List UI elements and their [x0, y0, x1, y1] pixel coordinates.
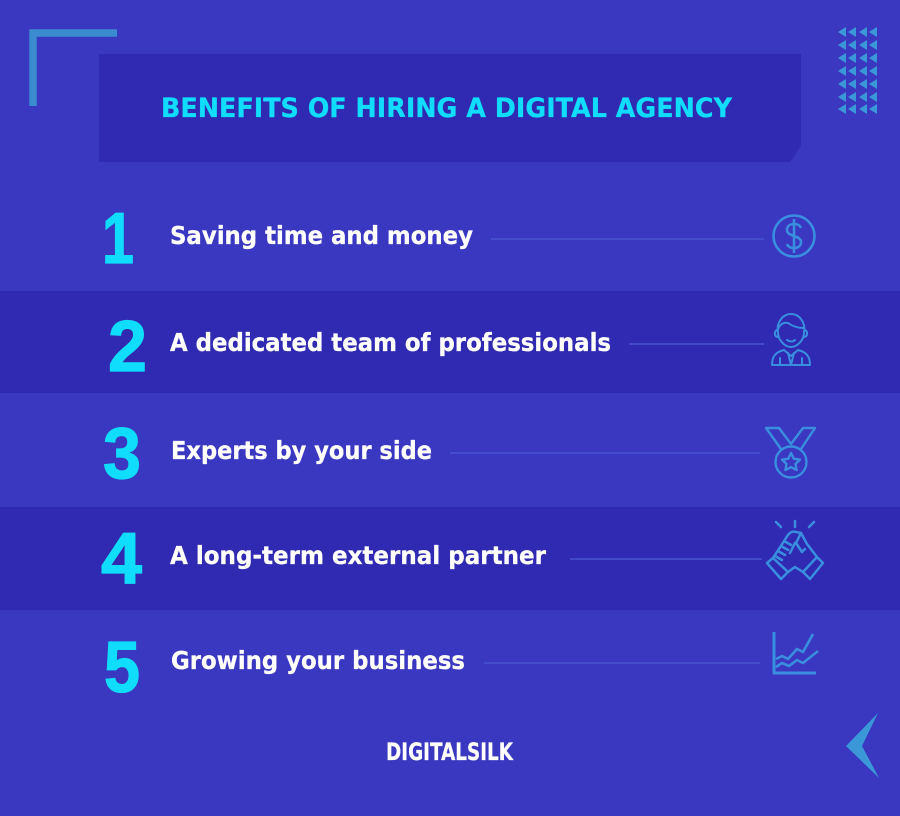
band: row 2 background — [0, 291, 900, 393]
icon: clasped hands — [767, 521, 823, 579]
label 4: A long-term external partner — [170, 541, 547, 570]
decorative arrow — [846, 713, 879, 778]
number 5: 5 — [104, 628, 140, 708]
row 1: saving time and money — [102, 199, 814, 279]
band: row 4 background — [0, 507, 900, 610]
label 2: A dedicated team of professionals — [170, 328, 611, 357]
number 2: 2 — [108, 307, 147, 387]
title: BENEFITS OF HIRING A DIGITAL AGENCY — [161, 93, 732, 124]
logo: Digital Silk: DIGITALSILK — [386, 738, 514, 766]
decorative corner bracket — [33, 33, 117, 106]
label 1: Saving time and money — [170, 221, 473, 250]
row 2: dedicated team — [108, 307, 810, 387]
label 3: Experts by your side — [171, 436, 432, 465]
title panel — [99, 54, 801, 162]
number 3: 3 — [103, 414, 141, 494]
icon: professional person — [772, 314, 810, 365]
row 5: growing your business — [104, 628, 818, 708]
number 4: 4 — [101, 519, 142, 599]
icon: dollar coin — [774, 216, 814, 256]
decorative triangle grid — [838, 27, 877, 114]
row 3: experts by your side — [103, 414, 815, 494]
icon: line chart — [774, 632, 818, 673]
row 4: long-term partner — [101, 519, 823, 599]
number 1: 1 — [102, 199, 134, 279]
icon: medal — [766, 428, 815, 478]
label 5: Growing your business — [171, 646, 465, 675]
